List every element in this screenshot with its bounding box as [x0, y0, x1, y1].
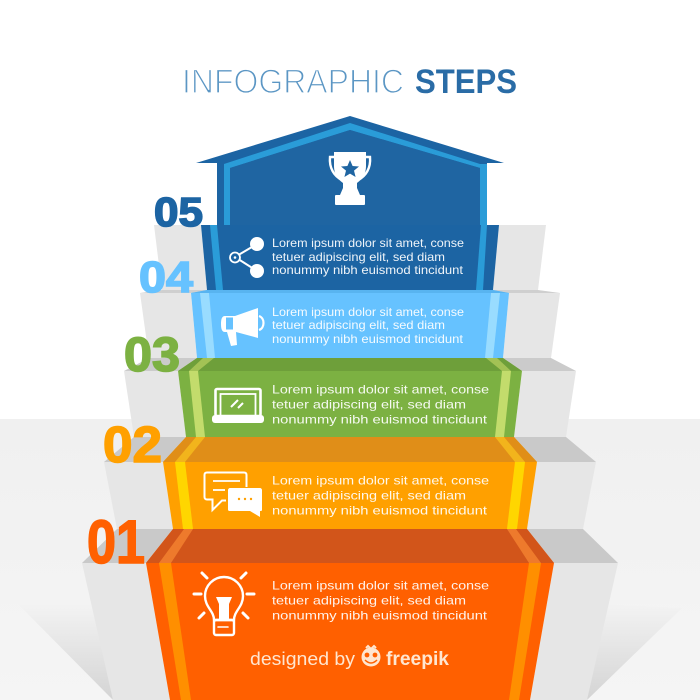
house roof: step 5 top	[196, 116, 504, 225]
step 4 band	[191, 290, 509, 358]
step 3 text	[272, 382, 489, 426]
number 05: 05	[154, 189, 203, 235]
title: INFOGRAPHIC	[182, 63, 404, 101]
step 2 text: nonummy nibh euismod tincidunt	[272, 504, 488, 518]
number 03: 03	[124, 329, 180, 382]
step 1 text	[272, 578, 489, 622]
freepik credit	[250, 646, 449, 670]
title: STEPS	[415, 63, 517, 101]
step 4 text: Lorem ipsum dolor sit amet, conse	[272, 305, 464, 319]
step 5 band	[201, 225, 499, 290]
step 4 text: nonummy nibh euismod tincidunt	[272, 332, 464, 346]
step 3 text: nonummy nibh euismod tincidunt	[272, 412, 488, 426]
grey staircase	[82, 225, 618, 700]
step 4 text: tetuer adipiscing elit, sed diam	[272, 318, 445, 332]
freepik credit: freepik	[386, 649, 449, 670]
step 1 band	[146, 529, 554, 700]
step 2 text: tetuer adipiscing elit, sed diam	[272, 488, 466, 502]
step 5 text	[272, 236, 464, 277]
number 04: 04	[139, 253, 194, 302]
icon: light bulb	[194, 573, 254, 635]
step 5 text: nonummy nibh euismod tincidunt	[272, 263, 464, 277]
icon: chat bubbles	[204, 472, 262, 517]
step 3 text: tetuer adipiscing elit, sed diam	[272, 398, 466, 412]
freepik credit: designed by	[250, 649, 355, 669]
step 5 text: tetuer adipiscing elit, sed diam	[272, 250, 445, 264]
icon: trophy	[330, 152, 370, 205]
step 5 text: Lorem ipsum dolor sit amet, conse	[272, 236, 464, 250]
step 3 band	[178, 358, 522, 437]
step 4 text	[272, 305, 464, 346]
step 2 band	[163, 437, 537, 529]
step 1 text: nonummy nibh euismod tincidunt	[272, 608, 488, 622]
icon: megaphone	[221, 308, 264, 346]
background floor	[0, 419, 700, 700]
step 1 text: tetuer adipiscing elit, sed diam	[272, 594, 466, 608]
step 2 text	[272, 474, 489, 518]
number 02: 02	[103, 416, 162, 473]
icon: laptop	[212, 389, 264, 423]
step 3 text: Lorem ipsum dolor sit amet, conse	[272, 382, 489, 396]
icon: share	[230, 238, 264, 278]
number 01: 01	[87, 508, 145, 576]
step 2 text: Lorem ipsum dolor sit amet, conse	[272, 474, 489, 488]
step 1 text: Lorem ipsum dolor sit amet, conse	[272, 578, 489, 592]
